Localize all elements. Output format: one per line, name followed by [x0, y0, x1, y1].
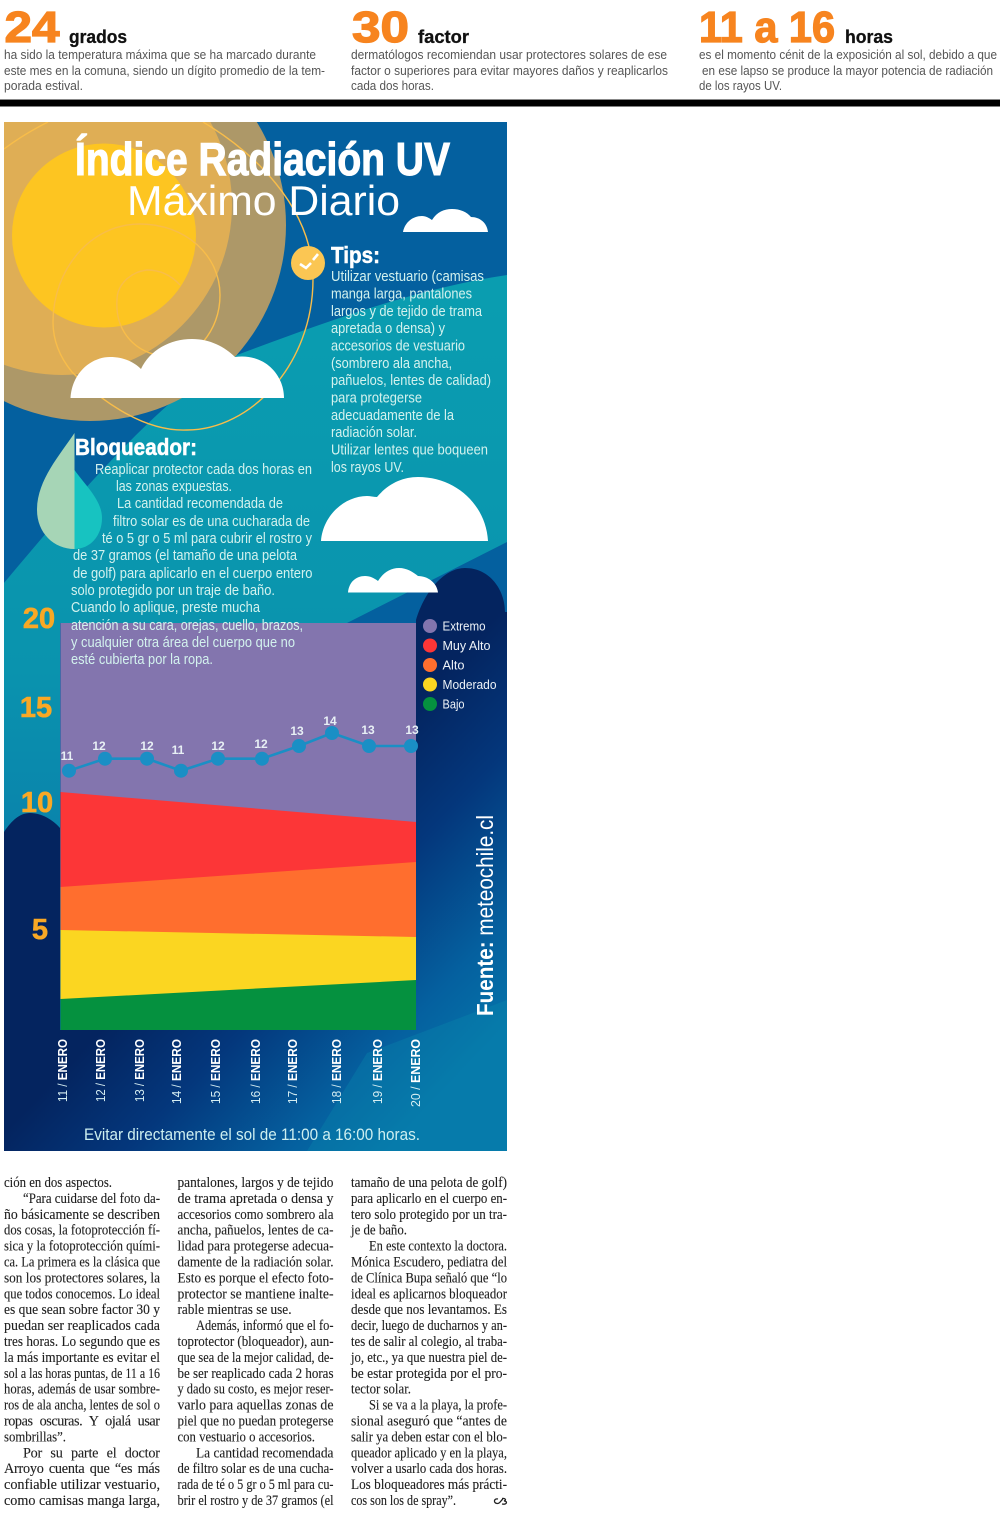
article column 3: salir ya deben estar con el blo- — [351, 1429, 507, 1445]
article column 2: be ser reaplicado cada 2 horas — [178, 1366, 334, 1382]
x axis labels: 17 / ENERO — [285, 1039, 300, 1104]
legend: Muy Alto — [442, 639, 491, 653]
article column 3: para aplicarlo en el cuerpo en- — [351, 1191, 507, 1207]
tips text: accesorios de vestuario — [331, 338, 465, 354]
data line: 12 — [92, 739, 106, 753]
article column 2: toprotector (bloqueador), aun- — [178, 1334, 334, 1350]
cloud: top right — [403, 209, 488, 232]
article column 1: ño básicamente se describen — [4, 1207, 160, 1223]
article column 2: piel que no puedan protegerse — [178, 1414, 334, 1430]
article column 2: damente de la radiación solar. — [178, 1254, 334, 1270]
stat: 24 grados: grados — [69, 27, 127, 47]
legend: Moderado — [442, 678, 497, 692]
data line: 14 — [323, 714, 337, 728]
bloqueador text: de golf) para aplicarlo en el cuerpo entero — [73, 566, 312, 582]
legend: Alto — [442, 658, 465, 672]
data line — [61, 714, 419, 778]
article column 2: con vestuario o accesorios. — [178, 1429, 315, 1445]
article column 1: sombrillas”. — [4, 1429, 66, 1445]
stat: 11 a 16 horas: horas — [845, 27, 893, 47]
x axis labels — [55, 1039, 423, 1107]
stat: 30 factor — [351, 3, 668, 93]
article column 1: dos cosas, la fotoprotección fí- — [4, 1223, 160, 1239]
article column 3: tamaño de una pelota de golf) — [351, 1175, 507, 1191]
x axis labels: 18 / ENERO — [329, 1039, 344, 1104]
bloqueador text: té o 5 gr o 5 ml para cubrir el rostro y — [102, 531, 313, 547]
y axis labels: 5 — [32, 914, 48, 946]
chart bands — [60, 623, 416, 1030]
data line: 12 — [254, 737, 268, 751]
title: Máximo Diario — [127, 177, 400, 224]
article column 1: ción en dos aspectos. — [4, 1175, 112, 1191]
article column 2: de filtro solar es de una cucha- — [178, 1461, 334, 1477]
article column 3: de Clínica Bupa señaló que “lo — [351, 1270, 507, 1286]
tips text: pañuelos, lentes de calidad) — [331, 373, 491, 389]
article column 3: volver a usarlo cada dos horas. — [351, 1461, 507, 1477]
x axis labels: 19 / ENERO — [370, 1039, 385, 1104]
icon: check badge — [291, 246, 325, 280]
article column 3: be estar protegida por el pro- — [351, 1366, 507, 1382]
article column 3: Mónica Escudero, pediatra del — [351, 1254, 507, 1270]
x axis labels: 11 / ENERO — [55, 1039, 70, 1102]
tips text: Utilizar lentes que boqueen — [331, 442, 488, 458]
tips text: Utilizar vestuario (camisas — [331, 269, 484, 285]
bloqueador text: La cantidad recomendada de — [117, 496, 283, 512]
source: Fuente: meteochile.cl — [472, 815, 498, 1016]
article column 1: son los protectores solares, la — [4, 1270, 161, 1286]
article column 1: sica y la fotoprotección quími- — [4, 1239, 160, 1255]
y axis labels — [20, 603, 55, 946]
stat: 11 a 16 horas: 11 a 16 — [699, 3, 835, 52]
data line: 11 — [61, 749, 74, 763]
article column 3: jo, etc., ya que nuestra piel de- — [350, 1350, 507, 1366]
legend: Bajo — [442, 698, 465, 712]
article column 3: decir, luego de ducharnos y an- — [351, 1318, 507, 1334]
article column 2: rable mientras se use. — [178, 1302, 292, 1318]
stat: 24 grados: porada estival. — [4, 79, 83, 93]
cloud: small — [348, 568, 438, 592]
y axis labels: 10 — [21, 787, 53, 819]
stat: 24 grados — [4, 3, 325, 93]
stat: 30 factor: factor o superiores para evitar mayores daños y reaplicarlos — [351, 64, 668, 78]
article column 3 — [350, 1175, 507, 1509]
data line: 11 — [172, 743, 185, 757]
article column 3: queador aplicado y en la playa, — [351, 1445, 507, 1461]
bloqueador text: esté cubierta por la ropa. — [71, 652, 213, 668]
bloqueador text — [71, 434, 313, 668]
article column 2 — [178, 1175, 334, 1509]
article column 1: es que sean sobre factor 30 y — [4, 1302, 161, 1318]
data line: 12 — [211, 739, 225, 753]
article column 1: puedan ser reaplicados cada — [4, 1318, 161, 1334]
article column 3: En este contexto la doctora. — [369, 1239, 507, 1255]
bloqueador text: atención a su cara, orejas, cuello, brazos, — [71, 618, 303, 634]
cloud: sun cloud — [70, 339, 284, 398]
x axis labels: 12 / ENERO — [93, 1039, 108, 1102]
stat: 30 factor: dermatólogos recomiendan usar protectores solares de ese — [351, 48, 667, 62]
sun graphic — [4, 122, 314, 431]
stat: 30 factor: 30 — [352, 3, 409, 52]
article column 1: Arroyo cuenta que “es más — [4, 1461, 160, 1477]
article column 3: Los bloqueadores más prácti- — [351, 1477, 507, 1493]
article column 3: desde que nos levantamos. Es — [351, 1302, 507, 1318]
article column 2: varlo para aquellas zonas de — [178, 1398, 334, 1414]
article column 2: lidad para protegerse adecua- — [178, 1239, 334, 1255]
bloqueador text: filtro solar es de una cucharada de — [113, 514, 310, 530]
y axis labels: 15 — [20, 692, 52, 724]
stat: 30 factor: factor — [418, 27, 469, 47]
bloqueador text: de 37 gramos (el tamaño de una pelota — [73, 548, 298, 564]
stat: 24 grados: ha sido la temperatura máxima que se ha marcado durante — [4, 48, 316, 62]
bloqueador text: Cuando lo aplique, preste mucha — [71, 600, 261, 616]
article column 2: rada de té o 5 gr o 5 ml para cu- — [178, 1477, 334, 1493]
x axis labels: 16 / ENERO — [248, 1039, 263, 1104]
bloqueador text: Bloqueador: — [75, 434, 197, 460]
article column 3: cos son los de spray”. — [351, 1493, 456, 1509]
data line: 13 — [290, 724, 304, 738]
title — [75, 133, 450, 224]
icon: end mark — [494, 1498, 506, 1504]
article column 3: sional aseguró que “antes de — [351, 1414, 507, 1430]
article column 2: ancha, pañuelos, lentes de ca- — [178, 1223, 334, 1239]
bloqueador text: Reaplicar protector cada dos horas en — [95, 462, 312, 478]
x axis labels: 13 / ENERO — [132, 1039, 147, 1102]
article column 1 — [4, 1175, 161, 1509]
tips text: para protegerse — [331, 390, 422, 406]
article column 1: sol a las horas puntas, de 11 a 16 — [4, 1366, 160, 1382]
data line: 13 — [405, 723, 419, 737]
article column 1: ropas oscuras. Y ojalá usar — [4, 1414, 160, 1430]
tips text: (sombrero ala ancha, — [331, 356, 452, 372]
article column 3: tero solo protegido por un tra- — [351, 1207, 507, 1223]
article column 1: tres horas. Lo segundo que es — [4, 1334, 160, 1350]
article column 2: accesorios como sombrero ala — [178, 1207, 334, 1223]
stat: 24 grados: este mes en la comuna, siendo un dígito promedio de la tem- — [4, 64, 325, 78]
article column 1: Por su parte el doctor — [23, 1445, 160, 1461]
article column 1: como camisas manga larga, — [4, 1493, 160, 1509]
article column 3: tector solar. — [351, 1382, 411, 1398]
tips text: largos y de tejido de trama — [331, 304, 483, 320]
x axis labels: 20 / ENERO — [408, 1039, 423, 1107]
cloud: tips cloud — [321, 477, 488, 541]
footer note: Evitar directamente el sol de 11:00 a 16:00 horas. — [84, 1126, 420, 1144]
chart: UV index — [20, 603, 423, 1107]
tips text: los rayos UV. — [331, 460, 404, 476]
bloqueador text: solo protegido por un traje de baño. — [71, 583, 275, 599]
bloqueador text: y cualquier otra área del cuerpo que no — [71, 635, 295, 651]
tips text: radiación solar. — [331, 425, 417, 441]
stat: 11 a 16 horas: de los rayos UV. — [699, 79, 782, 93]
article column 2: y dado su costo, es mejor reser- — [178, 1382, 334, 1398]
article column 1: horas, además de usar sombre- — [4, 1382, 160, 1398]
article column 2: La cantidad recomendada — [196, 1445, 334, 1461]
legend — [423, 619, 497, 712]
article column 3: Si se va a la playa, la profe- — [369, 1398, 507, 1414]
article column 2: brir el rostro y de 37 gramos (el — [178, 1493, 334, 1509]
tips text: apretada o densa) y — [331, 321, 446, 337]
x axis labels: 14 / ENERO — [169, 1039, 184, 1104]
icon: drop — [37, 433, 102, 549]
article column 1: “Para cuidarse del foto da- — [23, 1191, 160, 1207]
article column 1: ros de ala ancha, lentes de sol o — [4, 1398, 160, 1414]
bloqueador text: las zonas expuestas. — [116, 479, 232, 495]
article column 2: de trama apretada o densa y — [178, 1191, 334, 1207]
navy humps — [4, 568, 507, 1151]
article column 3: je de baño. — [350, 1223, 407, 1239]
article column 1: ca. La primera es la clásica que — [4, 1254, 160, 1270]
tips text: Tips: — [331, 242, 380, 268]
tips text — [331, 242, 491, 476]
panel: UV infographic — [0, 29, 507, 1151]
stat: 30 factor: cada dos horas. — [351, 79, 434, 93]
article column 2: que sea de la mejor calidad, de- — [178, 1350, 334, 1366]
article column 2: protector se mantiene inalte- — [178, 1286, 334, 1302]
data line: 13 — [361, 723, 375, 737]
article column 3: tes de salir al colegio, al traba- — [351, 1334, 507, 1350]
stat: 11 a 16 horas — [699, 3, 997, 93]
article column 1: confiable utilizar vestuario, — [4, 1477, 160, 1493]
title: Índice Radiación UV — [75, 133, 450, 185]
tips text: adecuadamente de la — [331, 408, 455, 424]
y axis labels: 20 — [23, 603, 55, 635]
article column 1: la más importante es evitar el — [4, 1350, 160, 1366]
article column 2: Además, informó que el fo- — [196, 1318, 334, 1334]
x axis labels: 15 / ENERO — [208, 1039, 223, 1104]
article column 2: Esto es porque el efecto foto- — [178, 1270, 334, 1286]
data line: 12 — [140, 739, 154, 753]
stat: 24 grados: 24 — [4, 3, 60, 52]
legend: Extremo — [442, 620, 486, 634]
article column 2: pantalones, largos y de tejido — [178, 1175, 334, 1191]
article column 1: que todos conocemos. Lo ideal — [4, 1286, 160, 1302]
tips text: manga larga, pantalones — [331, 286, 472, 302]
article column 3: ideal es aplicarnos bloqueador — [351, 1286, 507, 1302]
